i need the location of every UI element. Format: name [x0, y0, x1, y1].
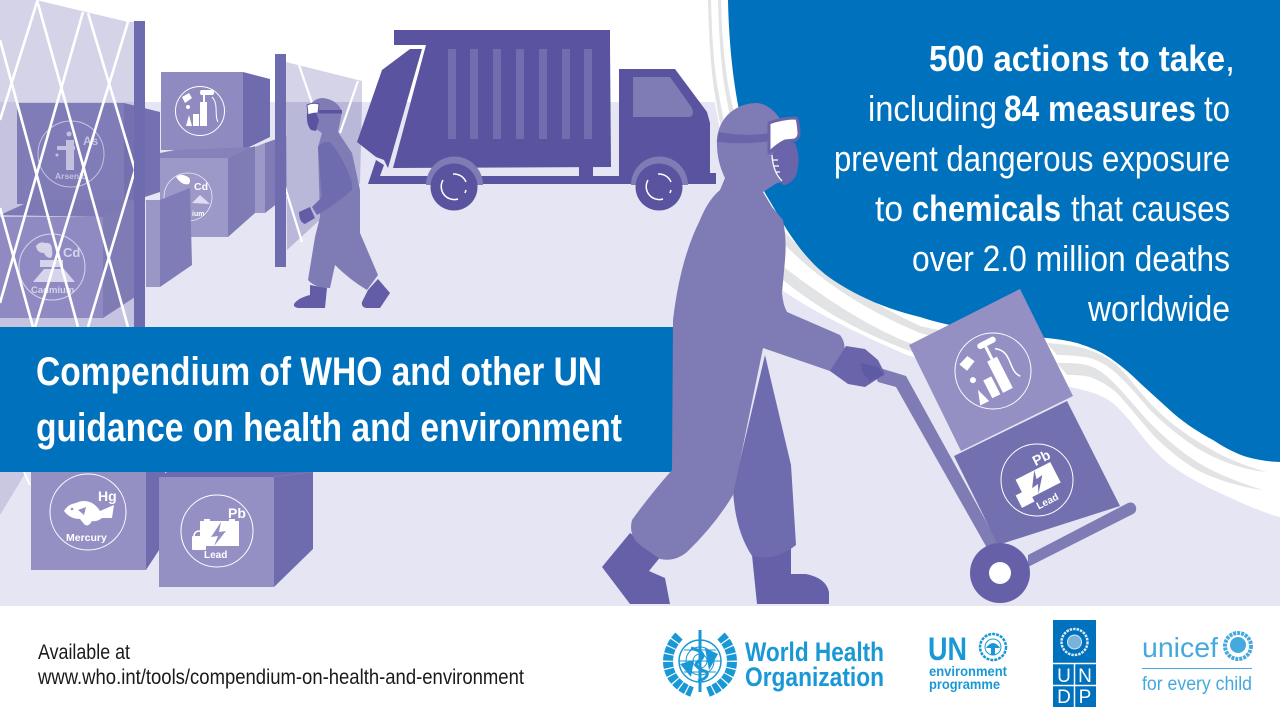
logo: UN environment programme: UN: [928, 631, 967, 667]
truck stripes: [448, 49, 592, 139]
box: cadmium middle: Cd: [194, 181, 208, 193]
box: chemicals top: [161, 72, 270, 150]
box: arsenic: [17, 103, 160, 204]
small worker strap: [319, 110, 342, 114]
headline statistic text: to: [1204, 88, 1230, 129]
small worker glove: [299, 207, 315, 224]
headline statistic text: worldwide: [1087, 288, 1230, 329]
lower left fence fragment: [0, 472, 30, 515]
box on trolley: lead: Pb: [1030, 446, 1053, 469]
headline statistic text: [834, 38, 1235, 329]
unicef emblem: [1225, 633, 1251, 659]
headline statistic text: to: [875, 188, 903, 229]
back leg: [733, 355, 796, 558]
blue headline shape: [728, 0, 1280, 462]
headline statistic text: 84 measures: [1004, 88, 1196, 129]
small worker mask: [307, 113, 319, 131]
logo: unicef: unicef: [1142, 632, 1218, 663]
box: mercury: Mercury: [66, 532, 107, 544]
rear boot: [602, 533, 670, 604]
fence post centre: [275, 54, 286, 267]
WHO wordmark: Organization: [745, 662, 884, 692]
box: arsenic: As: [83, 134, 99, 148]
title banner: [0, 327, 680, 472]
fence panel centre: [285, 62, 362, 250]
hand trolley with boxes: [870, 289, 1136, 603]
logo: World Health Organization: [668, 630, 884, 692]
truck body: [357, 30, 716, 184]
box on trolley: chemicals: [909, 289, 1073, 451]
respirator mask: [772, 141, 799, 185]
logo: unicef: [1142, 632, 1252, 695]
small worker arm: [312, 142, 352, 215]
logo: UN environment programme: environment: [929, 664, 1007, 679]
mask valve marks: [772, 155, 782, 181]
box: cadmium front: [0, 188, 192, 318]
goggles: [769, 118, 799, 153]
glove: [830, 346, 885, 387]
garbage truck: [357, 30, 716, 210]
WHO emblem: [668, 630, 732, 692]
trolley base plate: [1028, 502, 1136, 567]
headline statistic text: that causes: [1071, 188, 1230, 229]
box: mercury: Hg: [98, 488, 117, 504]
front wheel: [631, 156, 688, 210]
box: mercury: [31, 472, 165, 570]
large worker: [602, 103, 885, 604]
logo: UNDP: P: [1079, 687, 1091, 708]
logo: unicef: for every child: [1142, 674, 1252, 695]
small worker boots: [294, 279, 390, 308]
box on trolley: lead: Lead: [1035, 492, 1061, 512]
box: lead: Lead: [204, 550, 227, 561]
box: cadmium middle: [160, 135, 288, 237]
UN emblem: [980, 634, 1006, 660]
title text: guidance on health and environment: [36, 406, 622, 450]
logo: UNDP: D: [1057, 687, 1071, 708]
logo: UNDP: N: [1078, 666, 1092, 687]
small worker goggles: [307, 103, 319, 115]
box: cadmium front: Cd: [63, 245, 80, 260]
trolley wheel: [970, 543, 1030, 603]
WHO wordmark: [745, 637, 884, 692]
headline statistic text: chemicals: [912, 188, 1061, 229]
title text: Compendium of WHO and other UN: [36, 350, 602, 394]
headline statistic text: including: [868, 88, 997, 129]
box on trolley: lead: [954, 401, 1120, 545]
title text: [36, 350, 622, 450]
logo: UNDP: [1053, 620, 1096, 708]
suit and hood: [631, 103, 845, 560]
front boot: [752, 548, 829, 604]
small worker: [294, 98, 390, 308]
glove fingers: [861, 363, 884, 381]
trolley handle: [870, 365, 998, 548]
headline statistic text: over 2.0 million deaths: [912, 238, 1230, 279]
chain-link fence lattice: [0, 0, 135, 327]
fence post left: [134, 21, 145, 327]
box: lead: Pb: [228, 505, 246, 521]
logo: UNDP: U: [1057, 666, 1071, 687]
WHO wordmark: World Health: [745, 637, 884, 667]
fence panel left backing: [0, 0, 135, 327]
logo: UN environment programme: [928, 631, 1007, 692]
headline statistic text: ,: [1225, 38, 1235, 79]
box: cadmium front: Cadmium: [31, 285, 74, 296]
small worker suit and hood: [308, 98, 378, 290]
footer availability text: [37, 641, 524, 689]
floor background: [0, 102, 1280, 606]
logo: UN environment programme: programme: [929, 677, 1000, 692]
headline statistic text: 500 actions to take: [929, 38, 1225, 79]
goggle strap: [717, 132, 770, 143]
box: arsenic: Arsenic: [55, 171, 86, 181]
white wave band: [706, 0, 1280, 517]
footer availability text: www.who.int/tools/compendium-on-health-and-environment: [37, 666, 524, 689]
box: lead: [159, 472, 313, 587]
box: cadmium middle: ium: [192, 211, 204, 218]
grey wave stripes: [708, 0, 1267, 490]
headline statistic text: prevent dangerous exposure: [834, 138, 1230, 179]
truck window: [633, 77, 693, 117]
footer availability text: Available at: [38, 641, 130, 664]
rear wheel: [426, 156, 483, 210]
